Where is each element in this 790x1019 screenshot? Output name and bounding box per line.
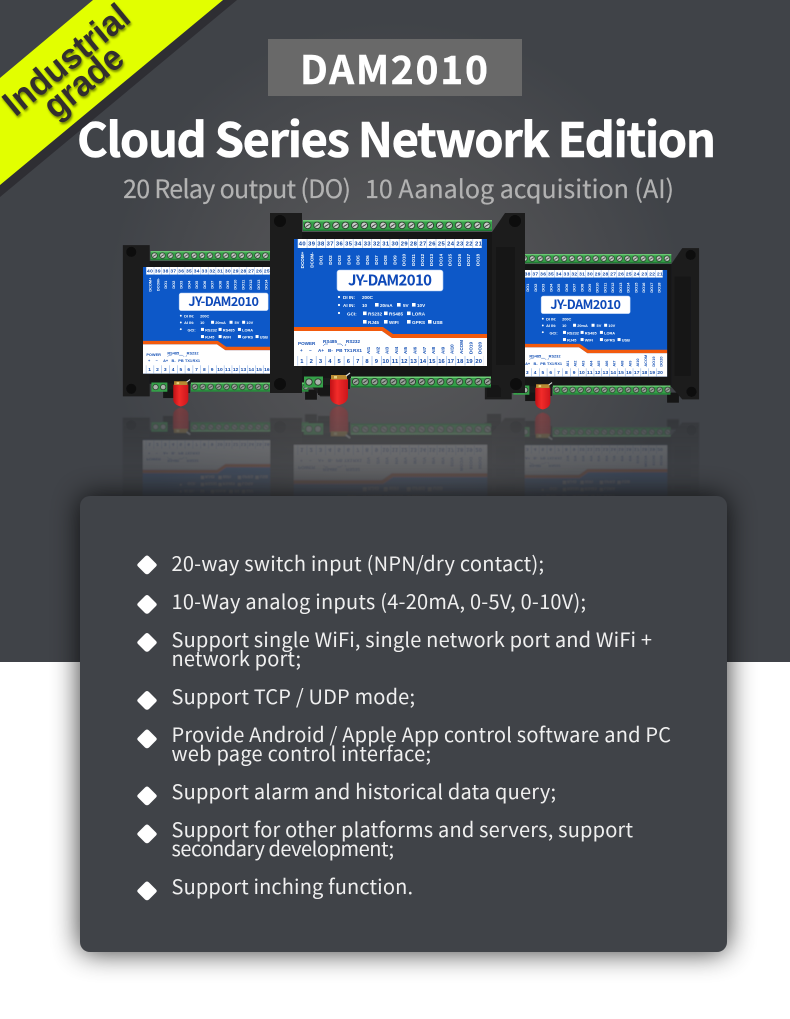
output channel labels: DO13 [429,254,434,266]
feature: app and web control: web page control interface; [172,738,431,767]
device: left JY-DAM2010 module: − [156,359,159,363]
output channel labels: DO6 [365,255,370,265]
device: right JY-DAM2010 module: DO9 [588,284,592,292]
device: left JY-DAM2010 module: RS485 [223,328,235,332]
device: right JY-DAM2010 module: LORA [604,331,615,335]
device: left JY-DAM2010 module: DO10 [234,280,238,290]
device specifications: RS485 [389,312,403,316]
device specifications: RS232 [368,312,382,316]
feature: inching: Support inching function. [172,871,413,900]
device: right JY-DAM2010 module: RS485 [529,354,542,358]
feature: WiFi and network port: Support single WiFi, single network port and WiFi + [172,624,652,653]
analog input channel labels: DO20 [478,342,483,354]
device: right JY-DAM2010 module: AI6 [605,361,609,367]
output channel labels: DO5 [356,255,361,265]
device: left JY-DAM2010 module: DO3 [180,281,184,289]
device specifications: RJ45 [368,320,379,325]
device: left JY-DAM2010 module: RJ45 [205,335,215,339]
device: right JY-DAM2010 module: A+ [525,362,531,366]
analog input channel labels: DO19 [468,342,473,354]
device: right JY-DAM2010 module: DO3 [542,284,546,292]
device specifications: 10 [362,303,368,308]
device: left JY-DAM2010 module: LORA [242,328,253,332]
device: right JY-DAM2010 module: WIFI [585,338,593,342]
device: right JY-DAM2010 module: RS232 [567,331,579,335]
device specifications: LORA [412,312,426,316]
feature: app and web control: Provide Android / Apple App control software and PC [172,719,671,748]
device: right JY-DAM2010 module: AI5 [597,360,601,367]
analog input channel labels: AI3 [385,346,390,354]
device: right JY-DAM2010 module: RS232 [549,354,560,358]
power and serial port labels: TX1 [344,348,353,353]
device: left JY-DAM2010 module: DCOM- [156,277,160,291]
device: right JY-DAM2010 module: GPRS [604,338,615,342]
device: right JY-DAM2010 module: 1234567891011121314151617181920 [510,370,663,376]
device: left JY-DAM2010 module: RS485 [167,351,180,355]
device specifications: WIFI [389,320,399,325]
reflection of the three devices [123,406,698,486]
device name label: JY-DAM2010 [348,270,432,290]
card shadow [80,496,727,952]
device: left JY-DAM2010 module: TX1 [185,359,193,363]
device: right JY-DAM2010 module: DO18 [658,282,662,293]
output channel labels: DO8 [383,255,388,265]
device: right JY-DAM2010 module: AI7 [613,361,617,367]
device specifications: 5V [403,303,410,308]
device: left JY-DAM2010 module: 20mA [215,321,226,325]
output channel labels: DO18 [475,254,480,266]
device: right JY-DAM2010 module: 10 [562,324,566,328]
device: right JY-DAM2010 module: DO12 [611,283,615,293]
device: left JY-DAM2010 module: DI IN: [184,314,194,318]
device: right JY-DAM2010 module: DO2 [534,284,538,292]
device: left JY-DAM2010 module: RX1 [193,359,201,363]
feature: WiFi and network port: network port; [172,643,301,672]
device: left JY-DAM2010 module: AI IN: [184,321,194,325]
device: centre JY-DAM2010 module [270,213,525,405]
device: right JY-DAM2010 module: 20mA [577,324,588,328]
device: right JY-DAM2010 module: AI8 [621,360,625,367]
device: left JY-DAM2010 module: DO6 [203,281,207,289]
device: right JY-DAM2010 module: DO19 [652,357,656,367]
device: right JY-DAM2010 module: 40 39 38 37 36 35 34 33 32 31 30 29 28 27 26 25 24 23 22 21 [509,272,663,278]
subheading: relay output and analog acquisition: 20 Relay output (DO) [123,170,351,206]
output channel labels: DO14 [438,254,444,266]
device: right JY-DAM2010 module: DO17 [650,283,654,293]
title: model badge: DAM2010 [300,40,488,96]
device: right JY-DAM2010 module: DO10 [596,283,600,293]
device: left JY-DAM2010 module: 200C [200,314,210,318]
device: right JY-DAM2010 module: DO16 [642,283,646,293]
device: right JY-DAM2010 module: DI IN: [546,317,556,321]
device: right JY-DAM2010 module: TX1 [547,362,555,366]
device: right JY-DAM2010 module: DO6 [565,284,569,292]
device: left JY-DAM2010 module: 40 39 38 37 36 35 34 33 32 31 30 29 28 27 26 25 24 23 22 21 [147,269,301,275]
output channel labels: DO16 [457,254,462,266]
device: left JY-DAM2010 module: DO7 [211,281,215,289]
output channel labels: DO15 [448,254,453,266]
device: right JY-DAM2010 module: DO20 [660,357,664,367]
analog input channel labels: AI7 [422,346,427,354]
device: right JY-DAM2010 module: AI3 [581,361,585,367]
device: left JY-DAM2010 module: DO5 [195,280,199,289]
power and serial port labels: PB [336,348,343,353]
output channel labels: DO9 [392,255,397,265]
device: left JY-DAM2010 module [123,245,337,406]
panel: feature list [80,496,727,952]
power and serial port labels: − [309,348,312,353]
feature: alarm and history: Support alarm and historical data query; [172,776,556,805]
device specifications: DI IN: [343,295,355,300]
feature: app and web control [137,719,671,767]
analog input channel labels: AI5 [403,346,408,354]
device: left JY-DAM2010 module: 1234567891011121314151617181920 [148,367,301,373]
device: right JY-DAM2010 module: USB [622,338,630,342]
device: right JY-DAM2010 module: DO15 [634,282,638,293]
device: right JY-DAM2010 module: AI2 [574,361,578,367]
device: right JY-DAM2010 module: DO1 [526,283,530,292]
power and serial port labels: POWER [298,341,316,346]
device: left JY-DAM2010 module: DO14 [265,279,269,290]
subheading: relay output and analog acquisition [123,170,674,206]
device: right JY-DAM2010 module: PB [540,362,546,366]
feature: analog inputs: 10-Way analog inputs (4-20mA, 0-5V, 0-10V); [172,586,586,615]
device: left JY-DAM2010 module: + [148,359,151,363]
analog input channel labels: AI9 [440,346,445,354]
output channel labels: DCOM+ [300,251,305,268]
device: left JY-DAM2010 module: GPRS [242,335,253,339]
feature: other platforms: Support for other platforms and servers, support [172,814,633,843]
analog input channel labels: ACOM [459,340,464,354]
device: right JY-DAM2010 module: DO11 [603,282,607,293]
power and serial port labels [298,339,362,353]
device: right JY-DAM2010 module: DO4 [549,283,553,292]
device: left JY-DAM2010 module: DO1 [164,280,168,289]
device: left JY-DAM2010 module: DO4 [187,280,191,289]
analog input channel labels: AI1 [366,346,371,354]
device: right JY-DAM2010 module: DO13 [619,283,623,293]
device specifications: 200C [362,295,374,300]
device: right JY-DAM2010 module: 5V [597,324,602,328]
analog input channel labels: AI4 [394,346,399,354]
feature: other platforms [137,814,633,862]
device: left JY-DAM2010 module: DO12 [249,280,253,290]
output channel labels: DO10 [402,254,407,266]
output channel labels: DO17 [466,254,471,266]
device specifications: 10V [417,303,426,308]
device: right JY-DAM2010 module: DO7 [573,284,577,292]
device: right JY-DAM2010 module: RX1 [555,362,563,366]
device specifications: GPRS [412,320,425,325]
output channel labels: DO4 [346,255,351,265]
device: right JY-DAM2010 module: AI9 [628,361,632,367]
power and serial port labels: RS485 [323,339,337,344]
feature: TCP and UDP mode: Support TCP / UDP mode; [172,681,415,710]
device: right JY-DAM2010 module: JY-DAM2010 [550,294,621,313]
device: right JY-DAM2010 module: DO14 [627,282,631,293]
terminal numbers 1 to 20: 1234567891011121314151617181920 [300,359,482,365]
power and serial port labels: + [300,348,303,353]
device: right JY-DAM2010 module: ACOM [644,355,648,367]
device: right JY-DAM2010 module: B- [534,362,538,366]
device: right JY-DAM2010 module: GCI: [550,331,558,335]
device: right JY-DAM2010 module: AI IN: [546,324,556,328]
device: left JY-DAM2010 module: B- [172,359,176,363]
device: left JY-DAM2010 module: 5V [235,321,240,325]
device: right JY-DAM2010 module [485,248,699,409]
device: left JY-DAM2010 module: RS232 [205,328,217,332]
device: left JY-DAM2010 module: 10 [200,321,204,325]
output channel labels: DO1 [319,255,324,265]
terminal numbers 40 to 21: 40 39 38 37 36 35 34 33 32 31 30 29 28 27 26 25 24 23 22 21 [299,242,483,248]
output channel labels: DO11 [411,254,416,266]
subheading: relay output and analog acquisition: 10 Aanalog acquisition (AI) [365,170,674,206]
feature: switch input: 20-way switch input (NPN/dry contact); [172,548,544,577]
power and serial port labels: RS232 [346,339,360,344]
device: left JY-DAM2010 module: DO9 [226,281,230,289]
device: left JY-DAM2010 module: DCOM+ [148,277,152,292]
output channel labels: DO12 [420,254,425,266]
analog input channel labels: AI8 [431,346,436,354]
device specifications: AI IN: [343,303,355,308]
power and serial port labels: B- [328,348,333,353]
device: right JY-DAM2010 module: AI10 [636,358,640,367]
device: right JY-DAM2010 module: AI1 [566,360,570,367]
device: right JY-DAM2010 module: AI4 [589,360,593,367]
device: right JY-DAM2010 module: DO5 [557,283,561,292]
device: right JY-DAM2010 module: 200C [562,317,572,321]
output channel labels: DCOM- [310,252,314,268]
analog input channel labels [366,340,483,354]
device: left JY-DAM2010 module: DO11 [241,279,245,290]
feature: other platforms: secondary development; [172,833,394,862]
device specifications: GCI: [347,312,357,316]
device: right JY-DAM2010 module: DO8 [580,283,584,292]
device: right JY-DAM2010 module: RJ45 [567,338,577,342]
output channel labels [300,251,480,268]
output channel labels: DO7 [374,255,379,265]
device specifications: USB [433,320,443,325]
device: right JY-DAM2010 module: RS485 [585,331,597,335]
analog input channel labels: AI6 [412,346,418,354]
device: left JY-DAM2010 module: RS232 [187,351,198,355]
device: left JY-DAM2010 module: DO8 [218,280,222,289]
ribbon: industrial grade [0,0,237,197]
analog input channel labels: AI2 [375,346,380,354]
heading: product series: Cloud Series Network Edition [77,102,716,171]
device: right JY-DAM2010 module: 10V [608,324,616,328]
device: left JY-DAM2010 module: GCI: [188,328,196,332]
device: left JY-DAM2010 module: A+ [163,359,169,363]
device: left JY-DAM2010 module: POWER [146,353,161,357]
power and serial port labels: RX1 [353,348,362,353]
output channel labels: DO2 [328,255,333,265]
ribbon: industrial grade: grade [35,36,132,126]
device: left JY-DAM2010 module: WIFI [223,335,231,339]
device: left JY-DAM2010 module: USB [260,335,268,339]
power and serial port labels: A+ [318,348,324,353]
page background: dark upper section [0,0,790,662]
device specifications: 20mA [380,303,393,308]
feature: WiFi and network port [137,624,652,672]
analog input channel labels: AI10 [450,344,455,354]
device: left JY-DAM2010 module: DO13 [257,280,261,290]
device: left JY-DAM2010 module: DO2 [172,281,176,289]
device: left JY-DAM2010 module: PB [178,359,184,363]
device: left JY-DAM2010 module: JY-DAM2010 [188,291,259,310]
output channel labels: DO3 [337,255,342,265]
device specifications [343,295,443,325]
device: left JY-DAM2010 module: 10V [246,321,254,325]
